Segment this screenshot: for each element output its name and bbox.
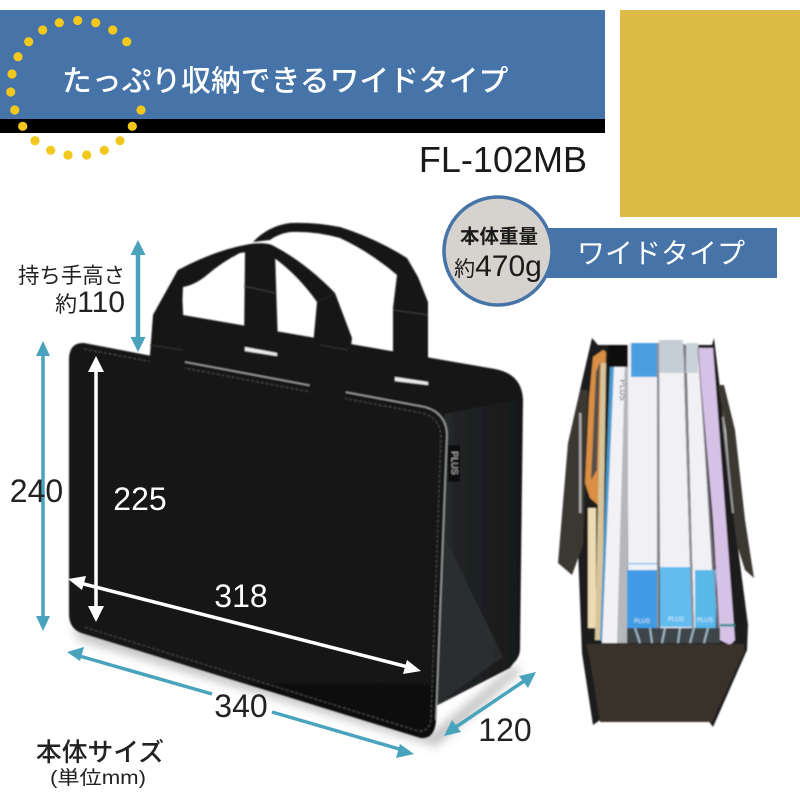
bag front stitching (84, 349, 441, 731)
height arrow (36, 341, 50, 631)
white binder (600, 367, 627, 643)
bag back panel (183, 315, 523, 700)
dimension labels: 240 (10, 473, 63, 509)
model number: FL-102MB (419, 139, 587, 180)
dimension labels: 318 (214, 578, 268, 614)
size caption: 本体サイズ (36, 738, 164, 767)
header banner (0, 10, 605, 133)
blue binder (627, 343, 658, 628)
PLUS side tag: PLUS (450, 451, 460, 475)
bag front lower panel (586, 644, 744, 722)
size caption (36, 738, 164, 789)
binder bottoms (627, 628, 720, 643)
bag front panel (69, 343, 447, 738)
size caption: (単位mm) (50, 767, 146, 789)
dimension labels: 約110 (55, 286, 125, 319)
tan sheets (595, 363, 606, 640)
bag photo: packed view from above (558, 338, 754, 727)
narrow binder: PLUS (697, 618, 713, 624)
bag side gusset (436, 399, 518, 706)
slot highlights (245, 347, 277, 356)
bag ground shadow (72, 625, 520, 746)
divider sheets (617, 367, 629, 643)
colour swatch (620, 10, 800, 217)
binder spine lines (658, 343, 693, 628)
light binder: PLUS (668, 617, 684, 623)
banner title: たっぷり収納できるワイドタイプ (62, 65, 509, 98)
yellow dotted circle (6, 16, 146, 160)
inner width arrow (68, 576, 421, 674)
blue binder: PLUS (634, 619, 650, 625)
orange folder (585, 350, 606, 505)
weight badge: 本体重量 (460, 226, 538, 248)
weight badge: 約470g (454, 250, 542, 283)
bag inner and sides (578, 338, 748, 727)
light binder (659, 340, 692, 628)
dimension labels: 340 (214, 688, 268, 724)
weight badge (444, 197, 552, 305)
lilac binder (698, 348, 735, 645)
dimension labels: 120 (478, 712, 532, 748)
handle height arrow (130, 240, 146, 352)
type label bar (540, 228, 777, 278)
dimension labels: 225 (113, 481, 167, 517)
right strap (718, 385, 754, 578)
narrow binder (686, 343, 716, 628)
dark top gap (608, 345, 630, 366)
back handle (244, 223, 428, 380)
inner height arrow (88, 356, 104, 622)
depth arrow (444, 672, 536, 736)
PLUS side tag (448, 445, 460, 482)
width arrow (67, 647, 414, 758)
bag photo: side view with dimensions (69, 223, 523, 746)
cream sheet (588, 508, 596, 628)
white binder: PLUS (618, 380, 627, 400)
left strap (558, 390, 588, 575)
dimension labels (10, 264, 532, 748)
front handle (148, 243, 352, 417)
dimension labels: 持ち手高さ (18, 264, 125, 288)
type label bar: ワイドタイプ (577, 238, 745, 269)
